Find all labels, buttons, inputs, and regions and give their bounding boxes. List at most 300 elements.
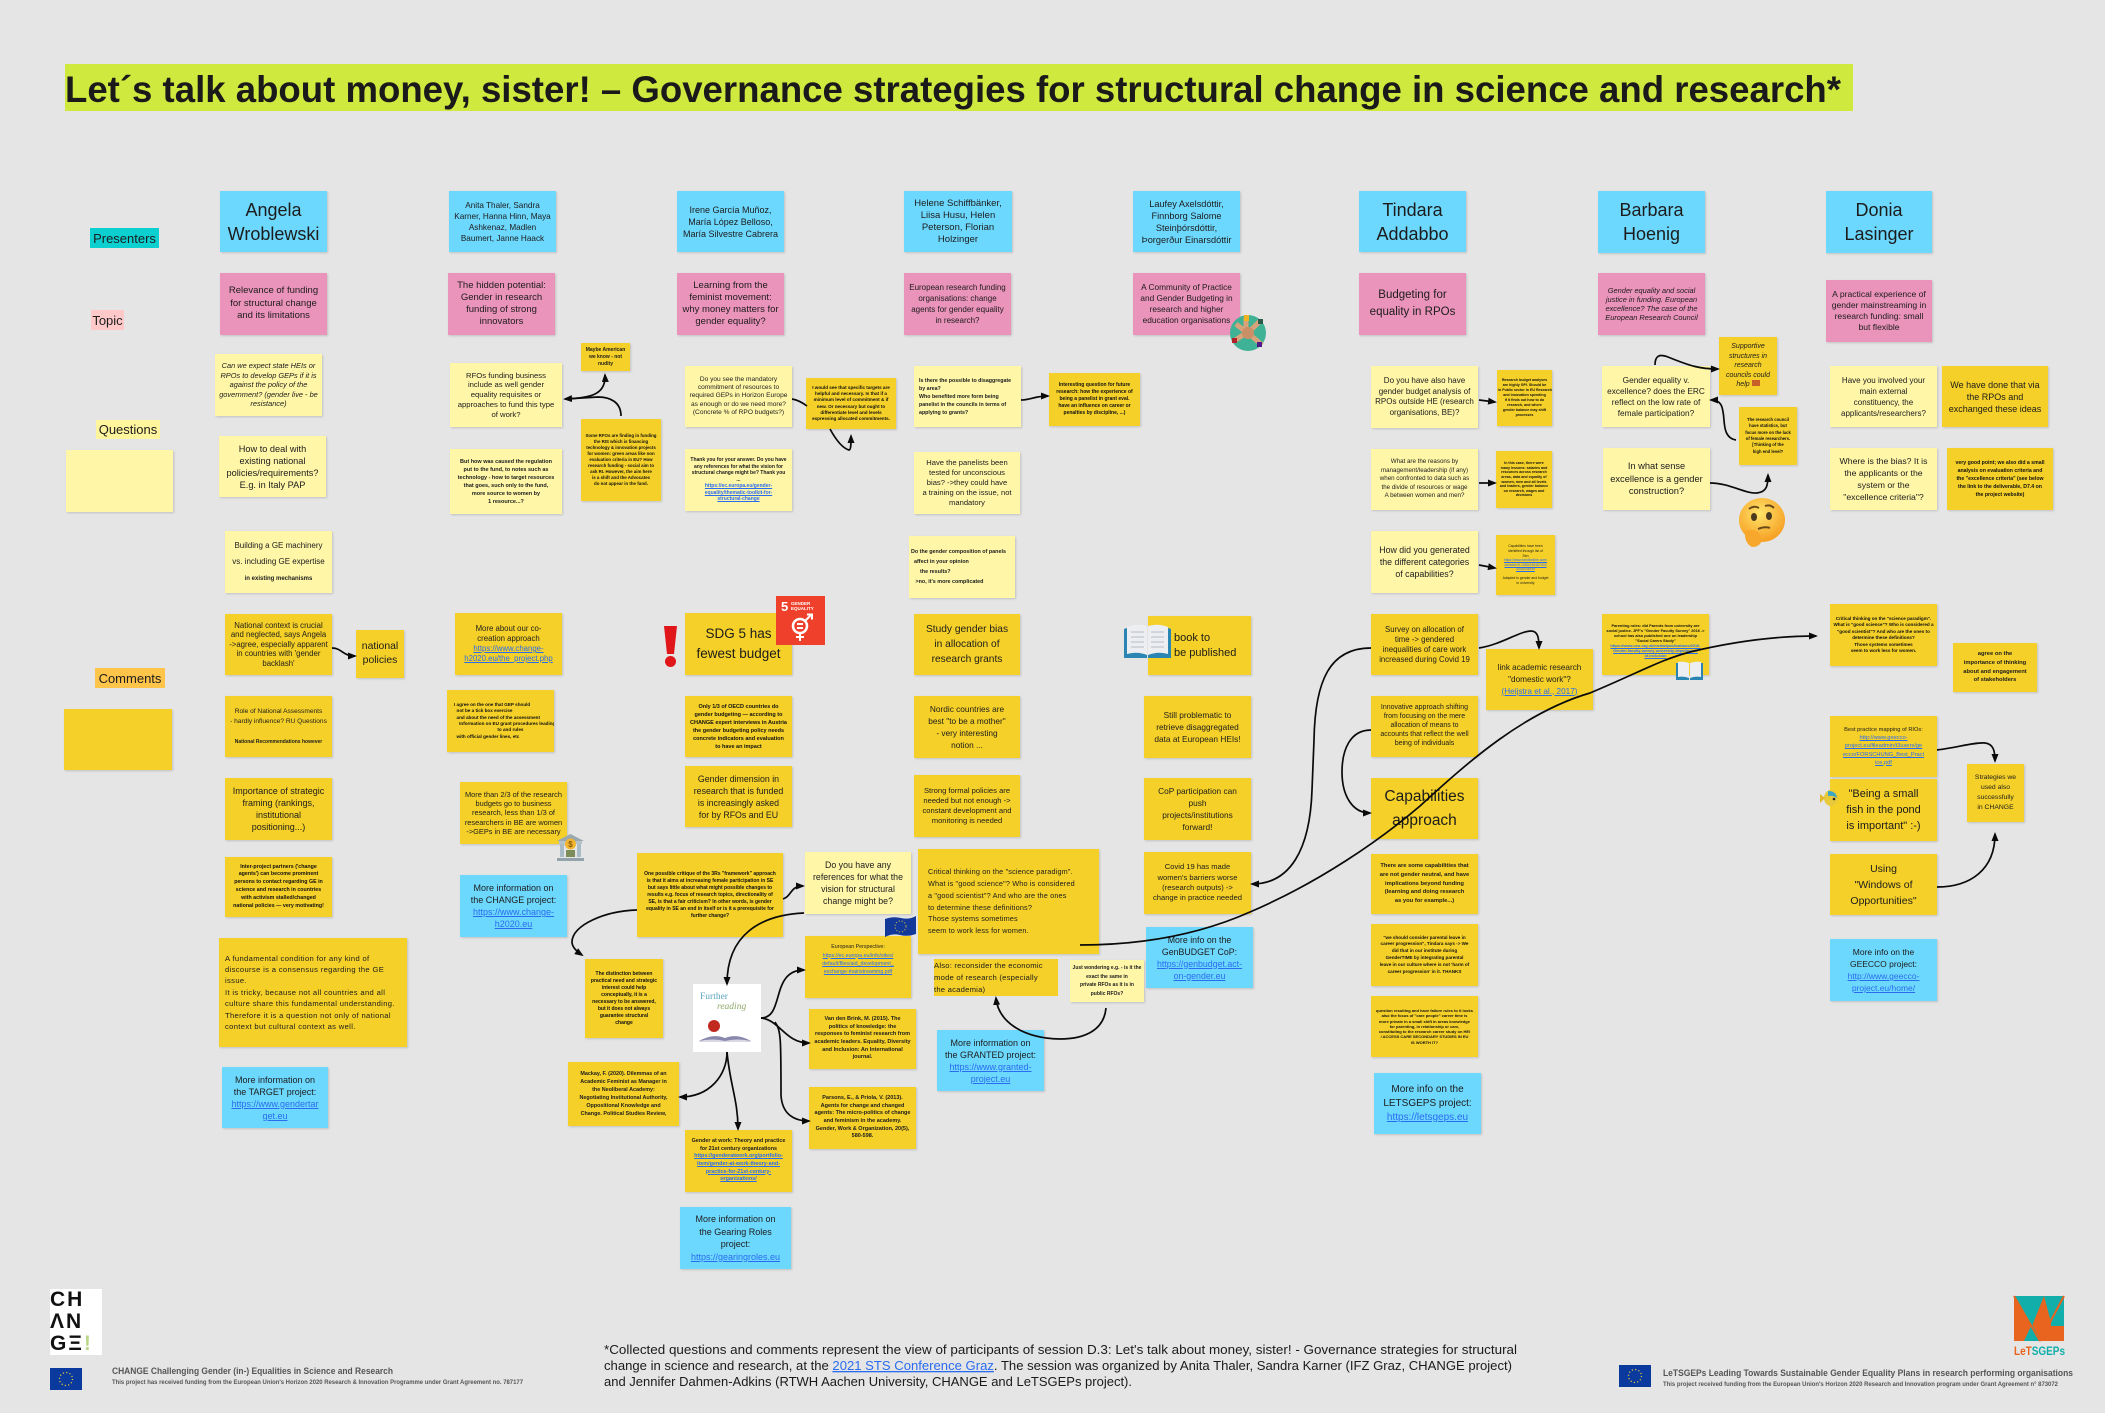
comment: capabilities reference: Capabilities have been (1508, 544, 1543, 548)
comment: agree on importance: importance of thinking (1964, 660, 2026, 666)
image: further reading (693, 984, 761, 1052)
arrow: targets note loop (830, 429, 851, 450)
topic: funding organisations: in research? (935, 316, 980, 325)
comment: agree note: with official gender lines, etc (457, 734, 519, 739)
icon: bank (557, 834, 584, 861)
comment: small yellow note (581, 343, 630, 371)
comment: question note (1371, 996, 1478, 1057)
comment: agree note: and about the need of the assessment (457, 715, 540, 720)
question: unconscious bias: bias? ->they could have (927, 478, 1007, 487)
comment: best practice mapping: ecco/FORSCHUNG_Best_Pract (1843, 752, 1924, 758)
comment: pale small note (1070, 960, 1144, 1002)
topic: European Research Council: European Research Council (1605, 313, 1698, 322)
presenter: Angela Wroblewski (220, 191, 327, 252)
comment: book to be published: be published (1174, 646, 1236, 658)
comment: fundamental condition: issue. (225, 976, 247, 985)
funding text: CHANGE (112, 1366, 523, 1386)
comment: framework critique (637, 853, 783, 937)
comment: national policies: national (362, 641, 398, 652)
presenter: Irene Garcia Munoz and team (677, 191, 784, 252)
comment: Parsons reference: Gender, Work & Organization, 20(5), (816, 1126, 909, 1132)
comment: RFO funding note: Some RFOs are finding in funding (586, 433, 656, 438)
comment: national context: in countries with 'gender (237, 649, 320, 658)
question: where is the bias: "excellence criteria"? (1843, 492, 1924, 502)
comment: agree on importance (1953, 643, 2037, 692)
comment: Covid barriers (1144, 852, 1251, 914)
question: aggregate by area: by area? (919, 386, 941, 392)
question: where is the bias: the applicants or the (1844, 468, 1923, 478)
comment: study gender bias: Study gender bias (926, 624, 1008, 635)
comment: Covid barriers: change in practice needed (1153, 893, 1242, 902)
presenter: Donia Lasinger: Lasinger (1844, 224, 1914, 244)
comment: Nordic countries: notion ... (951, 740, 983, 750)
comment: parental leave note: GenderTIME by integrating parental (1386, 955, 1463, 960)
comment: question note: also the focus of "care people" career time is (1382, 1013, 1467, 1018)
question: state HEIs: against the policy of the (230, 380, 307, 389)
info: GRANTED project: the GRANTED project: (945, 1050, 1036, 1060)
question: excellence gender construction: In what sense (1628, 461, 1685, 471)
logo: CHANGE: ΛN (50, 1310, 83, 1333)
comment: GEP targets note: differentiate level and levels (820, 410, 882, 415)
comment: national policies (356, 630, 404, 678)
comment: budget note one: gender balance may shift (1503, 408, 1546, 412)
comment: budget note two (1496, 451, 1552, 508)
funding text: LeTSGEPs: LeTSGEPs Leading Towards Sustainable Gender Equality Plans in research performing organisations (1663, 1368, 2073, 1378)
question: RFOs funding (450, 363, 562, 427)
presenter: Irene Garcia Munoz and team: María López Belloso, (688, 216, 773, 226)
row label: Topic (91, 310, 124, 330)
comment: project partners (225, 857, 332, 917)
topic: hidden potential: The hidden potential: (457, 280, 546, 291)
comment: good point note (1947, 448, 2053, 510)
funding text: LeTSGEPs (1663, 1368, 2073, 1388)
comment: Nordic countries: best "to be a mother" (928, 716, 1006, 726)
comment: fundamental condition: Therefore it is a question not only of national (225, 1011, 391, 1020)
comment: economic mode of research (934, 959, 1058, 996)
comment: innovative approach (1371, 696, 1478, 757)
question: gender composition: Do the gender composition of panels (911, 549, 1006, 555)
presenter: Laufey Axelsdottir and team: Laufey Axelsdóttir, (1149, 198, 1224, 208)
comment: question note: IS WORTH IT? (1411, 1040, 1438, 1044)
comment: best practice mapping: project.eu/fileadmin/t3users/ge (1845, 743, 1922, 749)
comment: parental leave note: career progression", Tindara says -> We (1381, 941, 1468, 946)
question: categories of capabilities: of capabilities? (1395, 569, 1454, 579)
comment: national context (225, 614, 332, 675)
topic: budgeting for equality (1359, 273, 1466, 335)
comment: CoP participation (1144, 778, 1251, 840)
row label: Questions: Questions (99, 422, 157, 437)
arrow: best practice to strategies (1937, 743, 1995, 761)
comment: strategic framing: positioning...) (252, 822, 305, 832)
question: excellence gender construction: construction? (1629, 486, 1684, 496)
comment: critical thinking: What is "good science"? Who is considered (928, 879, 1075, 888)
question: unconscious bias: tested for unconscious (929, 468, 1005, 477)
comment: agree note: Information on EU grant procedures leading (459, 721, 554, 726)
footnote: and Jennifer Dahmen-Adkins (RTWH Aachen University, CHANGE and LeTSGEPs project). (604, 1374, 1132, 1389)
comment: capabilities note: are not gender neutral, and have (1380, 872, 1469, 878)
comment: researchers note: have statistics, but (1749, 423, 1787, 428)
comment: OECD gender budgeting: Only 1/3 of OECD countries do (698, 704, 779, 710)
funding text: LeTSGEPs: This project received funding from the European Union's Horizon 2020 Research and Innovation program under Grant Agreement n° 873072 (1663, 1380, 2058, 1388)
topic: community of practice (1133, 273, 1240, 335)
comment: budget note two: many lessons: salaries and (1501, 466, 1547, 470)
question: gender composition: the results? (920, 569, 951, 575)
comment: done via RPOs: We have done that via (1950, 380, 2040, 390)
logo: CHANGE: GΞ! (50, 1332, 93, 1355)
question: where is the bias (1830, 448, 1937, 510)
comment: role of national: - hardly influence? RU Questions (230, 718, 327, 724)
question: involved constituency: Have you involved your (1842, 376, 1925, 384)
comment: Van den Brink reference: responses to feminist research from (815, 1031, 910, 1037)
comment: GEP targets note: minimum level of commitment & if (814, 397, 888, 402)
comment: done via RPOs: the RPOs and (1967, 392, 2023, 402)
arrow: framework critique to distinction (572, 910, 637, 955)
question: gender equality vs excellence: excellence? does the ERC (1607, 386, 1705, 396)
topic: feminist movement: Learning from the (693, 280, 768, 291)
info: Gearing Roles project: project: (721, 1239, 750, 1249)
comment: gender dimension (685, 766, 792, 827)
comment: GEP targets note: I would see that specific targets are (812, 385, 890, 390)
comment: critical thinking: Those systems sometimes (928, 914, 1018, 923)
presenter: Tindara Addabbo (1359, 191, 1466, 252)
question: references for vision: change might be? (823, 896, 893, 906)
row label: Topic: Topic (92, 312, 123, 328)
topic: practical experience: A practical experience of (1832, 289, 1926, 299)
question: management reasons: management/leadership (if any) (1381, 467, 1468, 474)
comment: framework critique: equality in SE an end in itself or is it a prerequisite for (646, 906, 774, 912)
question: gender composition: affect in your opinion (914, 559, 969, 565)
comment: framework critique: One possible critique of the 3Rs "framework" approach (644, 870, 776, 876)
comment: capabilities approach: approach (1392, 812, 1457, 828)
comment: Gender at Work reference: for 21st century organizations (700, 1146, 777, 1152)
question: GE machinery: vs. including GE expertise (232, 556, 325, 566)
comment: strategic framing: Importance of strategic (233, 786, 324, 796)
comment: agree note: to and rules (497, 727, 523, 732)
info: GRANTED project: https://www.granted- (949, 1062, 1032, 1072)
comment: gender dimension: research that is funded (694, 786, 783, 796)
comment: distinction note: but it does not always (598, 1006, 650, 1012)
question: aggregate by area: Who benefited more form being (919, 394, 999, 400)
comment: agree note: I agree on the one that GEP should (454, 702, 530, 707)
question: RFOs funding: approaches to fund this type (458, 400, 554, 409)
question: RFOs funding: equality requisites or (471, 390, 541, 399)
comment: agree on importance: about and engagement (1963, 668, 2027, 674)
comment: Covid barriers: women's barriers worse (1158, 873, 1237, 882)
comment: good point note: very good point; we also did a small (1955, 460, 2045, 466)
EU flag: LeTSGEPs (1619, 1365, 1651, 1387)
comment: capabilities reference (1496, 535, 1555, 595)
comment: pale small note: private RFOs as it is in (1080, 982, 1134, 988)
comment: critical thinking: to determine these definitions? (928, 902, 1032, 912)
comment: strong formal policies (914, 775, 1020, 837)
comment: strong formal policies: monitoring is needed (932, 816, 1002, 825)
question: mandatory GEPs: commitment of resources to (698, 384, 779, 391)
comment: survey on allocation of time (1371, 614, 1478, 675)
comment: disaggregated data: Still problematic to (1164, 710, 1231, 720)
question: gender equality vs excellence: Gender equality v. (1623, 374, 1689, 384)
question: aggregate by area: panelist in the councils in terms of (919, 402, 1006, 408)
comment: windows of opportunities: "Windows of (1854, 878, 1912, 890)
question: state HEIs: RPOs to develop GEPs if it is (220, 371, 317, 380)
comment: Mackay reference: Negotiating Institutional Authority, (579, 1095, 668, 1101)
comment: supportive structures: councils could (1726, 372, 1770, 379)
info: GenBUDGET CoP: on-gender.eu (1174, 970, 1225, 980)
arrow: mandatory GEPs to targets note (792, 399, 807, 406)
comment: Gender at Work reference (685, 1130, 792, 1192)
comment: research budgets: ->GEPs in BE are necessary (466, 827, 561, 836)
topic: practical experience: research funding: small (1835, 311, 1923, 321)
EU flag: CHANGE (50, 1368, 82, 1390)
topic: budgeting for equality: equality in RPOs (1370, 306, 1455, 318)
info: TARGET project (222, 1067, 328, 1128)
question: references for vision (805, 852, 911, 914)
comment: career penalty note (1049, 373, 1140, 426)
comment: career penalty note: penalties by discipline, ...) (1064, 410, 1125, 416)
topic: community of practice: research and higher (1150, 304, 1223, 314)
comment: European perspective: https://ec.europa.eu/info/sites/ (823, 953, 893, 959)
comment: budget note one: in Public sector in EU Research (1498, 388, 1552, 392)
presenter: Donia Lasinger (1826, 191, 1932, 253)
comment: CoP participation: projects/institutions (1162, 810, 1233, 820)
comment: best practice mapping: Best practice mapping of RIOs: (1844, 727, 1923, 733)
comment: GEP targets note: helpful and necessary. Is that if a (815, 391, 887, 396)
topic: feminist movement (677, 273, 784, 335)
comment: national context: and neglected, says Angela (231, 630, 326, 639)
footnote (604, 1342, 1517, 1389)
topic: funding organisations: European research funding (909, 283, 1006, 292)
question: gender equality vs excellence (1602, 366, 1710, 427)
icon: bank: $ (568, 840, 573, 849)
arrow: funding note to RFOs question (565, 397, 621, 416)
comment: innovative approach: accounts that reflect the well (1380, 731, 1469, 738)
question: gender equality vs excellence: female participation? (1618, 408, 1694, 418)
comment: parenting note: social justice. JFF's "Gender Faculty Survey" 2016 -> (1606, 628, 1705, 632)
info: LETSGEPS project (1374, 1073, 1481, 1134)
comment: small yellow note: nudity (598, 360, 613, 366)
comment: capabilities note: (learning and doing research (1385, 889, 1464, 895)
comment: research budgets: budgets go to business (475, 799, 552, 808)
question: involved constituency (1830, 366, 1937, 427)
comment: OECD gender budgeting (685, 696, 792, 757)
presenter: Barbara Hoenig (1598, 191, 1705, 253)
comment: distinction note (585, 959, 663, 1038)
comment: question note: question resulting and have failure rules to it looks (1376, 1008, 1473, 1013)
comment: GEP targets note (806, 378, 896, 429)
question: unconscious bias: Have the panelists been (926, 458, 1008, 467)
comment: good point note: the "excellence criteria" (see below (1956, 476, 2044, 482)
comment: done via RPOs (1942, 366, 2048, 427)
question: mandatory GEPs: required GEPs in Horizon Europe (690, 392, 787, 399)
comment: parenting note (1602, 614, 1709, 675)
question: regulation: But how was caused the regulation (460, 458, 552, 464)
comment: best practice mapping (1830, 716, 1937, 777)
icon: SDG 5 gender equality (776, 596, 825, 645)
arrow: RFOs question to small note (565, 375, 605, 399)
arrow: further reading to Van den Brink (761, 1018, 809, 1043)
comment: distinction note: necessary to be answered, (592, 998, 656, 1004)
arrow: budget question one (1479, 400, 1495, 402)
arrow: windows of opportunities to strategies (1937, 834, 1995, 887)
question: unconscious bias (914, 452, 1020, 514)
comment: capabilities reference: in university (1517, 581, 1534, 585)
comment: distinction note: The distinction between (596, 970, 652, 976)
comment: strong formal policies: needed but not enough -> (923, 796, 1011, 805)
arrow: further reading to European perspective (761, 970, 804, 1018)
arrow: critical thinking long connector (1080, 636, 1816, 945)
presenter: Barbara Hoenig: Hoenig (1623, 224, 1680, 244)
presenter: Laufey Axelsdottir and team: Finnborg Salome (1152, 210, 1221, 220)
topic: European Research Council: Gender equality and social (1608, 286, 1695, 295)
presenter: Anita Thaler and team: Anita Thaler, Sandra (465, 200, 540, 210)
funding text: CHANGE: This project has received funding from the European Union's Horizon 2020 Research & Innovation Programme under Grant Agreement no. 787177 (112, 1379, 523, 1386)
question: further links: https://ec.europa.eu/gender- (705, 483, 772, 489)
question: state HEIs (215, 354, 322, 416)
comment: supportive structures: research (1734, 362, 1762, 369)
comment: innovative approach: allocation of means to (1390, 722, 1459, 729)
comment: OECD gender budgeting: CHANGE expert interviews in Austria (690, 720, 787, 726)
logo: CHANGE (50, 1289, 102, 1355)
comment: OECD gender budgeting: gender budgeting — according to (694, 712, 782, 718)
question: further links: structural change might be? Thank you (692, 470, 785, 476)
comment: European perspective: European Perspective: (831, 944, 885, 950)
topic: community of practice: A Community of Practice (1141, 282, 1232, 292)
comment: question note: / ACCESS CARE SECONDARY STUDIES IN EU (1381, 1034, 1468, 1039)
comment: strategic framing: institutional (256, 810, 301, 820)
question: involved constituency: main external (1859, 386, 1908, 396)
comment: economic mode of research: Also: reconsider the economic (934, 960, 1043, 970)
comment: strong formal policies: constant development and (922, 806, 1012, 815)
comment: best practice mapping: http://www.geecco- (1859, 735, 1908, 741)
comment: project partners: science and research in countries (236, 887, 321, 893)
comment: parenting note: of-inclusion (1644, 652, 1667, 658)
comment: role of national (225, 696, 332, 757)
footnote: *Collected questions and comments represent the view of participants of session D.3: Let's talk about money, sister! - Governance strategies for structural (604, 1342, 1517, 1357)
info: Gearing Roles project: More information on (695, 1214, 776, 1224)
comment: project partners: Inter-project partners ('change (240, 864, 317, 870)
question: mandatory GEPs (685, 366, 792, 427)
comment: parental leave note: did that in our institute during (1392, 948, 1457, 953)
icon: SDG 5 gender equality: GENDER (791, 601, 811, 606)
comment: capabilities reference: 2000078934 (1516, 567, 1535, 571)
comment: critical thinking (918, 849, 1099, 954)
row label: Comments (95, 668, 165, 688)
comment: budget note two: on research, wages and (1504, 489, 1544, 493)
comment: critical thinking copy: What is "good science"? Who is considered a (1833, 622, 1934, 627)
comment: distinction note: practical need and strategic (591, 978, 657, 984)
comment: parenting note: Gender-faculty-survey-university-department- (1613, 648, 1698, 652)
question: unconscious bias: mandatory (949, 498, 985, 507)
info: CHANGE project: More information on (473, 883, 554, 893)
comment: agree on importance: agree on the (1978, 651, 2012, 657)
comment: good point note: the link to the deliverable, D7.4 on (1958, 484, 2042, 490)
comment: CoP participation: CoP participation can (1158, 786, 1237, 796)
question: aggregate by area: applying to grants? (919, 410, 968, 416)
question: state HEIs: resistance) (250, 399, 287, 408)
presenter: Tindara Addabbo: Tindara (1382, 200, 1443, 220)
comment: strategies we used (1967, 764, 2024, 822)
topic: community of practice: and Gender Budgeting in (1140, 293, 1233, 303)
comment: RFO funding note: the RIS which is financing (594, 439, 648, 444)
question: categories of capabilities: the different categories (1380, 557, 1469, 567)
comment: small yellow note: Maybe American (586, 346, 625, 352)
comment: best practice mapping: ice.pdf (1875, 760, 1892, 766)
comment: fundamental condition: It is tricky, because not all countries and all (225, 988, 385, 997)
comment: critical thinking: seem to work less for women. (928, 926, 1029, 935)
comment: question note: for parenting, in relationship or care, (1390, 1024, 1459, 1029)
comment: small yellow note: we know - not (589, 354, 622, 360)
arrow: further reading to Gender at work (727, 1052, 738, 1129)
question: gender budget analysis: Do you have also have (1384, 376, 1465, 385)
empty question note (66, 450, 173, 512)
comment: budget note two: and leaders, gender balance (1500, 484, 1548, 488)
comment: small fish: "Being a small (1849, 788, 1918, 800)
comment: Gender at Work reference: Gender at work: Theory and practice (692, 1138, 785, 1144)
comment: RFO funding note (581, 419, 661, 501)
comment: Parsons reference: agents: The micro-politics of change (815, 1110, 910, 1116)
comment: Covid barriers: (research outputs) -> (1162, 883, 1233, 892)
question: references for vision: references for what the (813, 872, 903, 882)
topic: budgeting for equality: Budgeting for (1378, 289, 1447, 301)
presenter: Irene Garcia Munoz and team: María Silvestre Cabrera (683, 228, 778, 238)
comment: Van den Brink reference (809, 1009, 916, 1069)
question: regulation: technology - how to target resources (458, 474, 554, 480)
info: GEECCO project: GEECCO project: (1850, 959, 1917, 969)
question: gender budget analysis: organisations, BE)? (1390, 408, 1459, 416)
comment: pale small note: exact the same in (1086, 974, 1128, 980)
comment: budget note two: decisions (1516, 493, 1532, 497)
comment: Gender at Work reference: item/gender-at-work-theory-and- (697, 1161, 780, 1167)
presenter: Angela Wroblewski: Angela (245, 200, 302, 220)
comment: framework critique: but says little about what might possible changes to (648, 884, 772, 890)
comment: gender dimension: for by RFOs and EU (699, 810, 778, 820)
comment: framework critique: results e.g. focus of research topics, directionality of (647, 892, 773, 898)
comment: critical thinking copy: "good scientist"? And who are the ones to (1837, 628, 1930, 634)
info: GEECCO project: project.eu/home/ (1852, 983, 1915, 993)
comment: study gender bias: in allocation of (934, 639, 1000, 650)
info: GRANTED project: project.eu (971, 1074, 1010, 1084)
title banner: Let´s talk about money, sister! – Governance strategies for structural change in science and research* (65, 69, 1842, 110)
comment: CoP participation: forward! (1182, 822, 1212, 832)
question: gender composition: >no, it's more complicated (915, 579, 983, 585)
comment: research budgets (460, 782, 567, 844)
comment: Parsons reference: and feminism in the academy. (824, 1118, 901, 1124)
comment: parental leave note (1371, 924, 1478, 986)
comment: RFO funding note: research funding - social aim to (588, 463, 654, 468)
comment: innovative approach: being of individuals (1395, 740, 1454, 747)
comment: agree note: not be a tick box exercise (457, 708, 512, 713)
comment: RFO funding note: do not appear in the fund. (594, 481, 648, 486)
question: gender composition (909, 536, 1015, 598)
question: unconscious bias: a training on the issue, not (922, 488, 1012, 497)
arrow: survey to academic research (1479, 631, 1539, 648)
info: TARGET project: the TARGET project: (234, 1086, 316, 1096)
info: Gearing Roles project: the Gearing Roles (699, 1226, 772, 1236)
presenter: Anita Thaler and team (449, 191, 556, 252)
comment: supportive structures: structures in (1729, 353, 1767, 360)
comment: Gender at Work reference: https://genderatwork.org/portfolio- (694, 1153, 783, 1159)
comment: small fish (1830, 779, 1937, 841)
question: where is the bias: system or the (1857, 480, 1910, 490)
comment: capabilities note: as you for example...) (1395, 898, 1454, 904)
arrow: further reading to Mackay (680, 1052, 727, 1097)
comment: Nordic countries: Nordic countries are (930, 704, 1004, 714)
info: GenBUDGET CoP (1146, 927, 1253, 988)
comment: distinction note: guarantee structural (600, 1012, 648, 1018)
question: involved constituency: applicants/researchers? (1841, 408, 1926, 418)
arrow: innovative approach to capabilities (1342, 730, 1371, 813)
comment: parenting note: Parenting roles: did Parents from university are (1612, 622, 1700, 628)
comment: RFO funding note: evaluation criteria in EU? How (589, 457, 653, 462)
